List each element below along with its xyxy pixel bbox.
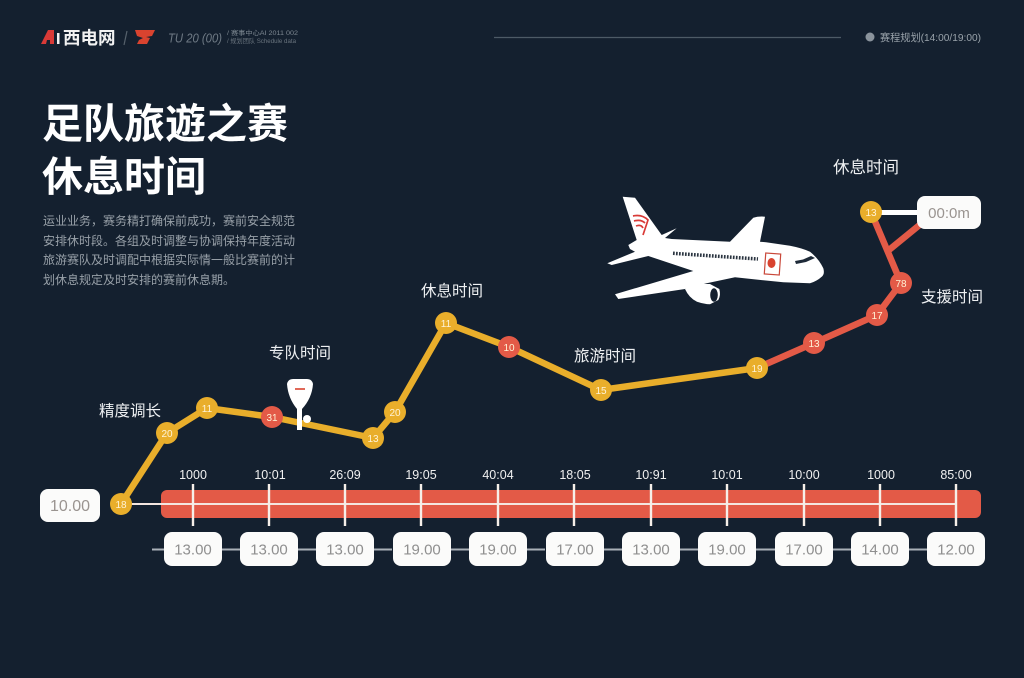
header rule <box>494 36 841 38</box>
yellow nodes: 11 <box>202 404 213 415</box>
top right time pill: 00:0m <box>928 205 970 222</box>
box connectors <box>152 548 927 550</box>
red nodes: 10 <box>503 343 515 354</box>
tick time labels: 40:04 <box>482 468 514 482</box>
title: 足队旅遊之赛 <box>42 101 288 147</box>
box time values <box>174 542 975 558</box>
red bar <box>161 490 981 518</box>
bottom time boxes row <box>152 532 985 566</box>
route stage labels: 精度调长 <box>99 402 161 420</box>
route stage labels: 休息时间 <box>421 282 483 300</box>
route stage labels: 休息时间 <box>833 158 899 177</box>
tick time labels: 19:05 <box>405 468 437 482</box>
box time values: 17.00 <box>556 542 594 558</box>
red nodes: 78 <box>895 279 907 290</box>
tick time labels: 26:09 <box>329 468 361 482</box>
body text block: 划休息规定及时安排的赛前休息期。 <box>43 272 235 287</box>
tick marks <box>193 484 956 526</box>
body text block: 安排休时段。各组及时调整与协调保持年度活动 <box>43 233 295 248</box>
partner small text: / 赛事中心AI 2011 002 <box>227 28 298 37</box>
logo slash <box>124 31 127 45</box>
tick time labels <box>179 468 972 482</box>
yellow nodes: 20 <box>161 429 173 440</box>
icon: red partner logo <box>135 30 155 44</box>
red nodes <box>261 272 912 428</box>
red branch to top pill <box>889 223 922 250</box>
logo name: 西电网 <box>63 28 116 48</box>
top right time pill <box>917 196 981 229</box>
yellow nodes: 11 <box>441 319 452 330</box>
route stage labels: 支援时间 <box>921 288 983 306</box>
plane silhouette: fuselage, tail and wings <box>607 197 824 299</box>
box time values: 19.00 <box>708 542 746 558</box>
yellow route line <box>121 323 757 504</box>
body text block: 运业业务，赛务精打确保前成功，赛前安全规范 <box>43 213 295 228</box>
box time values: 17.00 <box>785 542 823 558</box>
tick time labels: 1000 <box>179 468 207 482</box>
tick time labels: 18:05 <box>559 468 591 482</box>
tick time labels: 85:00 <box>940 468 972 482</box>
box time values: 19.00 <box>479 542 517 558</box>
logo divider bar <box>57 33 60 44</box>
tick time labels: 1000 <box>867 468 895 482</box>
header right: rule and caption <box>494 31 981 44</box>
icon: globe <box>866 32 874 42</box>
title <box>42 101 288 200</box>
box time values: 13.00 <box>632 542 670 558</box>
yellow nodes <box>110 201 882 515</box>
plane cockpit windows <box>795 256 815 264</box>
tick time labels: 10:91 <box>635 468 667 482</box>
plane tail logo <box>633 216 648 235</box>
left start pill: 10.00 <box>50 498 90 515</box>
tick time labels: 10:01 <box>254 468 286 482</box>
route stage labels <box>99 158 983 420</box>
yellow nodes: 19 <box>751 364 763 375</box>
red nodes: 17 <box>871 311 883 322</box>
title: 休息时间 <box>42 154 206 200</box>
plane cabin windows <box>673 253 758 259</box>
header caption: 赛程规划(14:00/19:00) <box>880 31 981 44</box>
red nodes: 31 <box>266 413 278 424</box>
red nodes: 13 <box>808 339 820 350</box>
icon: red A logo <box>41 30 54 44</box>
body text block <box>43 213 295 287</box>
box time values: 13.00 <box>174 542 212 558</box>
plane door emblem <box>764 253 781 275</box>
airplane illustration <box>607 197 824 304</box>
tick time labels: 10:00 <box>788 468 820 482</box>
yellow nodes: 13 <box>865 208 877 219</box>
red route line <box>757 212 901 368</box>
center white line <box>130 503 957 505</box>
yellow nodes: 15 <box>595 386 607 397</box>
body text block: 旅游赛队及时调配中根据实际情一般比赛前的计 <box>43 252 295 267</box>
partner small text line two: / 规划团队 Schedule data <box>227 36 296 45</box>
plane engine intake <box>710 288 718 302</box>
plane engine <box>685 284 720 304</box>
horizontal timeline bar <box>130 468 981 526</box>
icon: map pin marker <box>287 379 313 430</box>
box backgrounds <box>164 532 985 566</box>
yellow nodes: 20 <box>389 408 401 419</box>
box time values: 13.00 <box>326 542 364 558</box>
route stage labels: 专队时间 <box>269 344 331 362</box>
yellow nodes: 18 <box>115 500 127 511</box>
tick time labels: 10:01 <box>711 468 743 482</box>
white connector to top pill <box>871 210 920 215</box>
box time values: 19.00 <box>403 542 441 558</box>
yellow nodes: 13 <box>367 434 379 445</box>
box time values: 12.00 <box>937 542 975 558</box>
header left: logo group <box>41 28 298 48</box>
route stage labels: 旅游时间 <box>574 347 636 365</box>
box time values: 13.00 <box>250 542 288 558</box>
box time values: 14.00 <box>861 542 899 558</box>
left start pill <box>40 489 100 522</box>
partner mark: TU 20 (00) <box>168 30 222 46</box>
route nodes <box>110 201 912 515</box>
